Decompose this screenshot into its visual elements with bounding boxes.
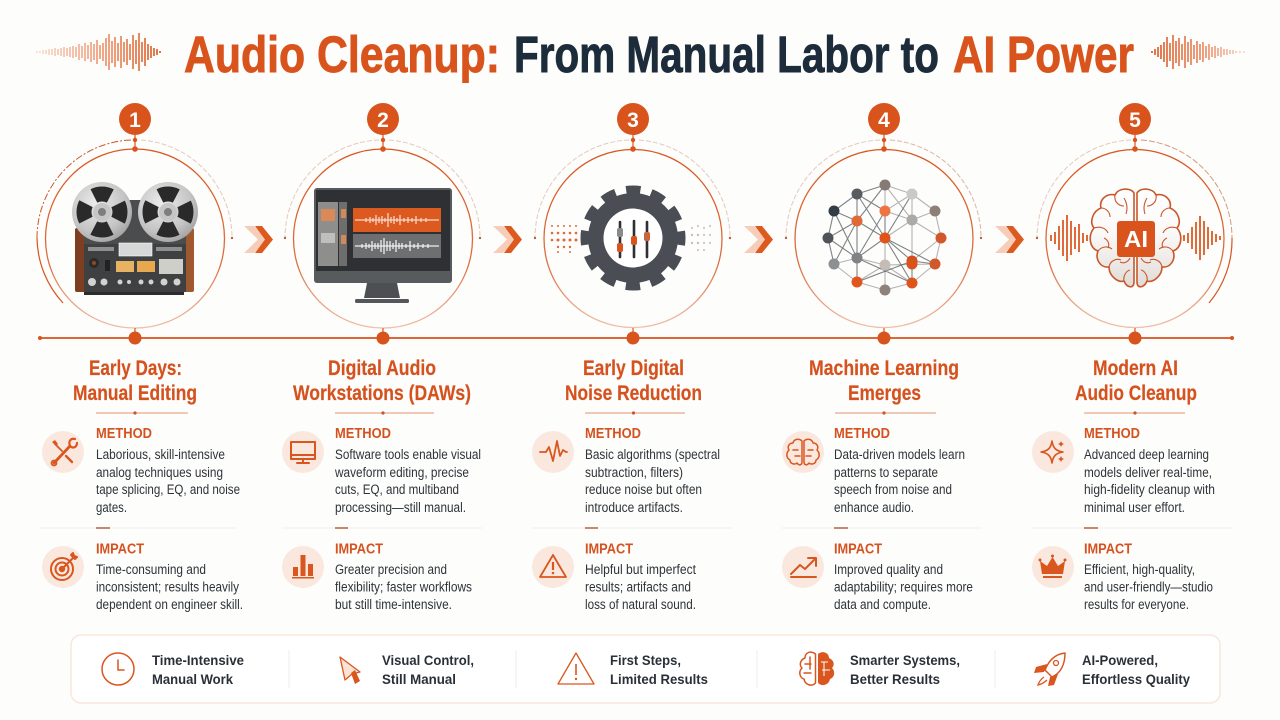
heading xyxy=(565,357,702,405)
heading: Manual Editing xyxy=(73,382,197,405)
column 1: early days xyxy=(40,357,243,612)
method text: Advanced deep learning xyxy=(1084,447,1209,462)
number badge 1: 1 xyxy=(129,109,141,132)
audio waves xyxy=(1051,215,1220,261)
method text: speech from noise and xyxy=(834,482,952,497)
method text: cuts, EQ, and multiband xyxy=(335,482,459,497)
impact text: IMPACT xyxy=(834,542,882,558)
heading: Digital Audio xyxy=(328,357,436,380)
summary text 3 xyxy=(610,652,708,687)
method text: minimal user effort. xyxy=(1084,500,1185,515)
summary text 2: Visual Control, xyxy=(382,652,474,668)
step 2 illustration: DAW monitor xyxy=(284,103,481,338)
heading: Modern AI xyxy=(1093,357,1178,380)
arrow 3 xyxy=(744,226,773,253)
impact text: loss of natural sound. xyxy=(585,597,696,612)
icon: pulse xyxy=(532,431,574,473)
impact text: adaptability; requires more xyxy=(834,580,973,594)
impact text: IMPACT xyxy=(335,542,383,558)
icon: right title waveform xyxy=(1152,35,1244,69)
heading: Noise Reduction xyxy=(565,382,702,405)
method text: Laborious, skill-intensive xyxy=(96,447,225,462)
AI chip: AI xyxy=(1124,226,1148,252)
method text xyxy=(1084,426,1215,515)
network edges xyxy=(828,185,941,290)
method text: patterns to separate xyxy=(834,465,938,480)
arrow 4 xyxy=(995,226,1024,253)
heading xyxy=(1075,357,1197,405)
summary text 4 xyxy=(850,652,960,687)
icon: left title waveform xyxy=(37,33,160,71)
impact text: Greater precision and xyxy=(335,562,447,577)
method text xyxy=(96,426,240,515)
heading: Audio Cleanup xyxy=(1075,382,1197,405)
heading: Early Digital xyxy=(583,357,684,380)
heading: Machine Learning xyxy=(809,357,959,380)
icon: brain outline xyxy=(782,431,824,473)
arrow 2 xyxy=(493,226,522,253)
summary panel xyxy=(71,635,1220,703)
number badge 1 xyxy=(119,103,151,152)
method text: analog techniques using xyxy=(96,465,223,480)
noise dots xyxy=(551,225,711,253)
title xyxy=(184,26,1134,83)
summary text 5: Effortless Quality xyxy=(1082,671,1190,687)
summary text 1: Time-Intensive xyxy=(152,652,244,668)
number badge 2: 2 xyxy=(377,109,389,132)
icon: warning xyxy=(532,546,574,588)
ring xyxy=(1036,140,1232,338)
icon: sparkle xyxy=(1032,431,1074,473)
summary text 3: Limited Results xyxy=(610,671,708,687)
column 3: early digital noise reduction xyxy=(532,357,732,612)
summary text 2 xyxy=(382,652,474,687)
impact text xyxy=(335,542,472,612)
heading xyxy=(73,357,197,405)
impact text: Improved quality and xyxy=(834,562,943,577)
impact text: IMPACT xyxy=(96,542,144,558)
method text: gates. xyxy=(96,500,127,515)
impact text: inconsistent; results heavily xyxy=(96,580,239,594)
step 5 illustration: AI brain xyxy=(1036,103,1232,338)
impact text: Helpful but imperfect xyxy=(585,562,696,577)
method text: processing—still manual. xyxy=(335,500,466,515)
timeline xyxy=(38,332,1234,344)
icon: monitor xyxy=(282,431,324,473)
method text: Basic algorithms (spectral xyxy=(585,447,720,462)
method text: Software tools enable visual xyxy=(335,447,481,462)
method text: tape splicing, EQ, and noise xyxy=(96,482,240,497)
number badge 5 xyxy=(1119,103,1151,152)
number badge 3: 3 xyxy=(627,109,639,132)
impact text xyxy=(1084,542,1213,612)
gear xyxy=(586,191,680,285)
summary text 1: Manual Work xyxy=(152,671,233,687)
method text: introduce artifacts. xyxy=(585,500,683,515)
impact text: IMPACT xyxy=(1084,542,1132,558)
number badge 5: 5 xyxy=(1129,109,1141,132)
ring xyxy=(37,140,233,338)
column 4: machine learning xyxy=(782,357,982,612)
heading xyxy=(293,357,471,405)
icon: wrench xyxy=(42,431,84,473)
heading: Early Days: xyxy=(89,357,182,380)
icon: bar chart xyxy=(282,546,324,588)
title: From Manual Labor to xyxy=(514,26,939,83)
column 2: digital audio workstations xyxy=(282,357,482,612)
step 1 illustration: tape machine xyxy=(37,103,233,338)
method text: Data-driven models learn xyxy=(834,447,965,462)
impact text: results; artifacts and xyxy=(585,580,691,594)
underline xyxy=(1084,411,1185,415)
brain xyxy=(1090,189,1181,287)
underline xyxy=(835,411,936,415)
number badge 4: 4 xyxy=(878,109,890,132)
method text xyxy=(334,426,481,515)
impact text xyxy=(834,542,973,612)
method text: METHOD xyxy=(96,426,152,442)
method text: METHOD xyxy=(1084,426,1140,442)
impact text: Efficient, high-quality, xyxy=(1084,562,1195,577)
method text xyxy=(834,426,965,515)
heading xyxy=(809,357,959,405)
title: Audio Cleanup: xyxy=(184,26,500,83)
monitor xyxy=(314,188,452,303)
number badge 3 xyxy=(617,103,649,152)
icon: cursor xyxy=(340,657,360,684)
summary text 2: Still Manual xyxy=(382,671,456,687)
summary text 5: AI-Powered, xyxy=(1082,652,1158,668)
summary text 4: Smarter Systems, xyxy=(850,652,960,668)
underline xyxy=(585,411,685,415)
arrow 1 xyxy=(244,226,273,253)
underline xyxy=(96,411,188,415)
impact text: but still time-intensive. xyxy=(335,597,452,612)
AI chip xyxy=(1117,221,1155,257)
method text: waveform editing, precise xyxy=(334,465,469,480)
icon: rocket xyxy=(1034,653,1065,686)
ring xyxy=(785,140,982,338)
icon: warning triangle xyxy=(558,653,594,684)
ring xyxy=(284,140,481,338)
title: AI Power xyxy=(953,26,1134,83)
summary text 5 xyxy=(1082,652,1190,687)
icon: target xyxy=(42,546,84,588)
impact text: results for everyone. xyxy=(1084,597,1189,612)
heading: Workstations (DAWs) xyxy=(293,382,471,405)
method text: models deliver real-time, xyxy=(1084,465,1212,480)
icon: crown xyxy=(1032,546,1074,588)
impact text: Time-consuming and xyxy=(96,562,206,577)
number badge 2 xyxy=(367,103,399,152)
underline xyxy=(335,411,434,415)
method text: enhance audio. xyxy=(834,500,914,515)
impact text: flexibility; faster workflows xyxy=(335,580,472,594)
icon: trend up xyxy=(782,546,824,588)
icon: half brain xyxy=(800,652,834,685)
column 5: modern AI xyxy=(1032,357,1232,612)
method text: subtraction, filters) xyxy=(585,465,683,480)
method text: reduce noise but often xyxy=(585,482,702,497)
method text: METHOD xyxy=(585,426,641,442)
tape deck xyxy=(72,182,198,295)
impact text: dependent on engineer skill. xyxy=(96,597,243,612)
method text: METHOD xyxy=(834,426,890,442)
step 3 illustration: gear xyxy=(534,103,731,338)
impact text xyxy=(585,542,696,612)
summary text 1 xyxy=(152,652,244,687)
method text xyxy=(585,426,720,515)
impact text: data and compute. xyxy=(834,597,931,612)
ring xyxy=(534,140,731,338)
impact text xyxy=(96,542,243,612)
summary text 4: Better Results xyxy=(850,671,940,687)
impact text: IMPACT xyxy=(585,542,633,558)
icon: clock xyxy=(102,653,134,685)
heading: Emerges xyxy=(848,382,921,405)
summary text 3: First Steps, xyxy=(610,652,681,668)
network nodes xyxy=(822,180,946,296)
method text: METHOD xyxy=(335,426,391,442)
number badge 4 xyxy=(868,103,900,152)
impact text: and user-friendly—studio xyxy=(1084,580,1213,594)
step 4 illustration: neural network xyxy=(785,103,982,338)
method text: high-fidelity cleanup with xyxy=(1084,482,1215,497)
